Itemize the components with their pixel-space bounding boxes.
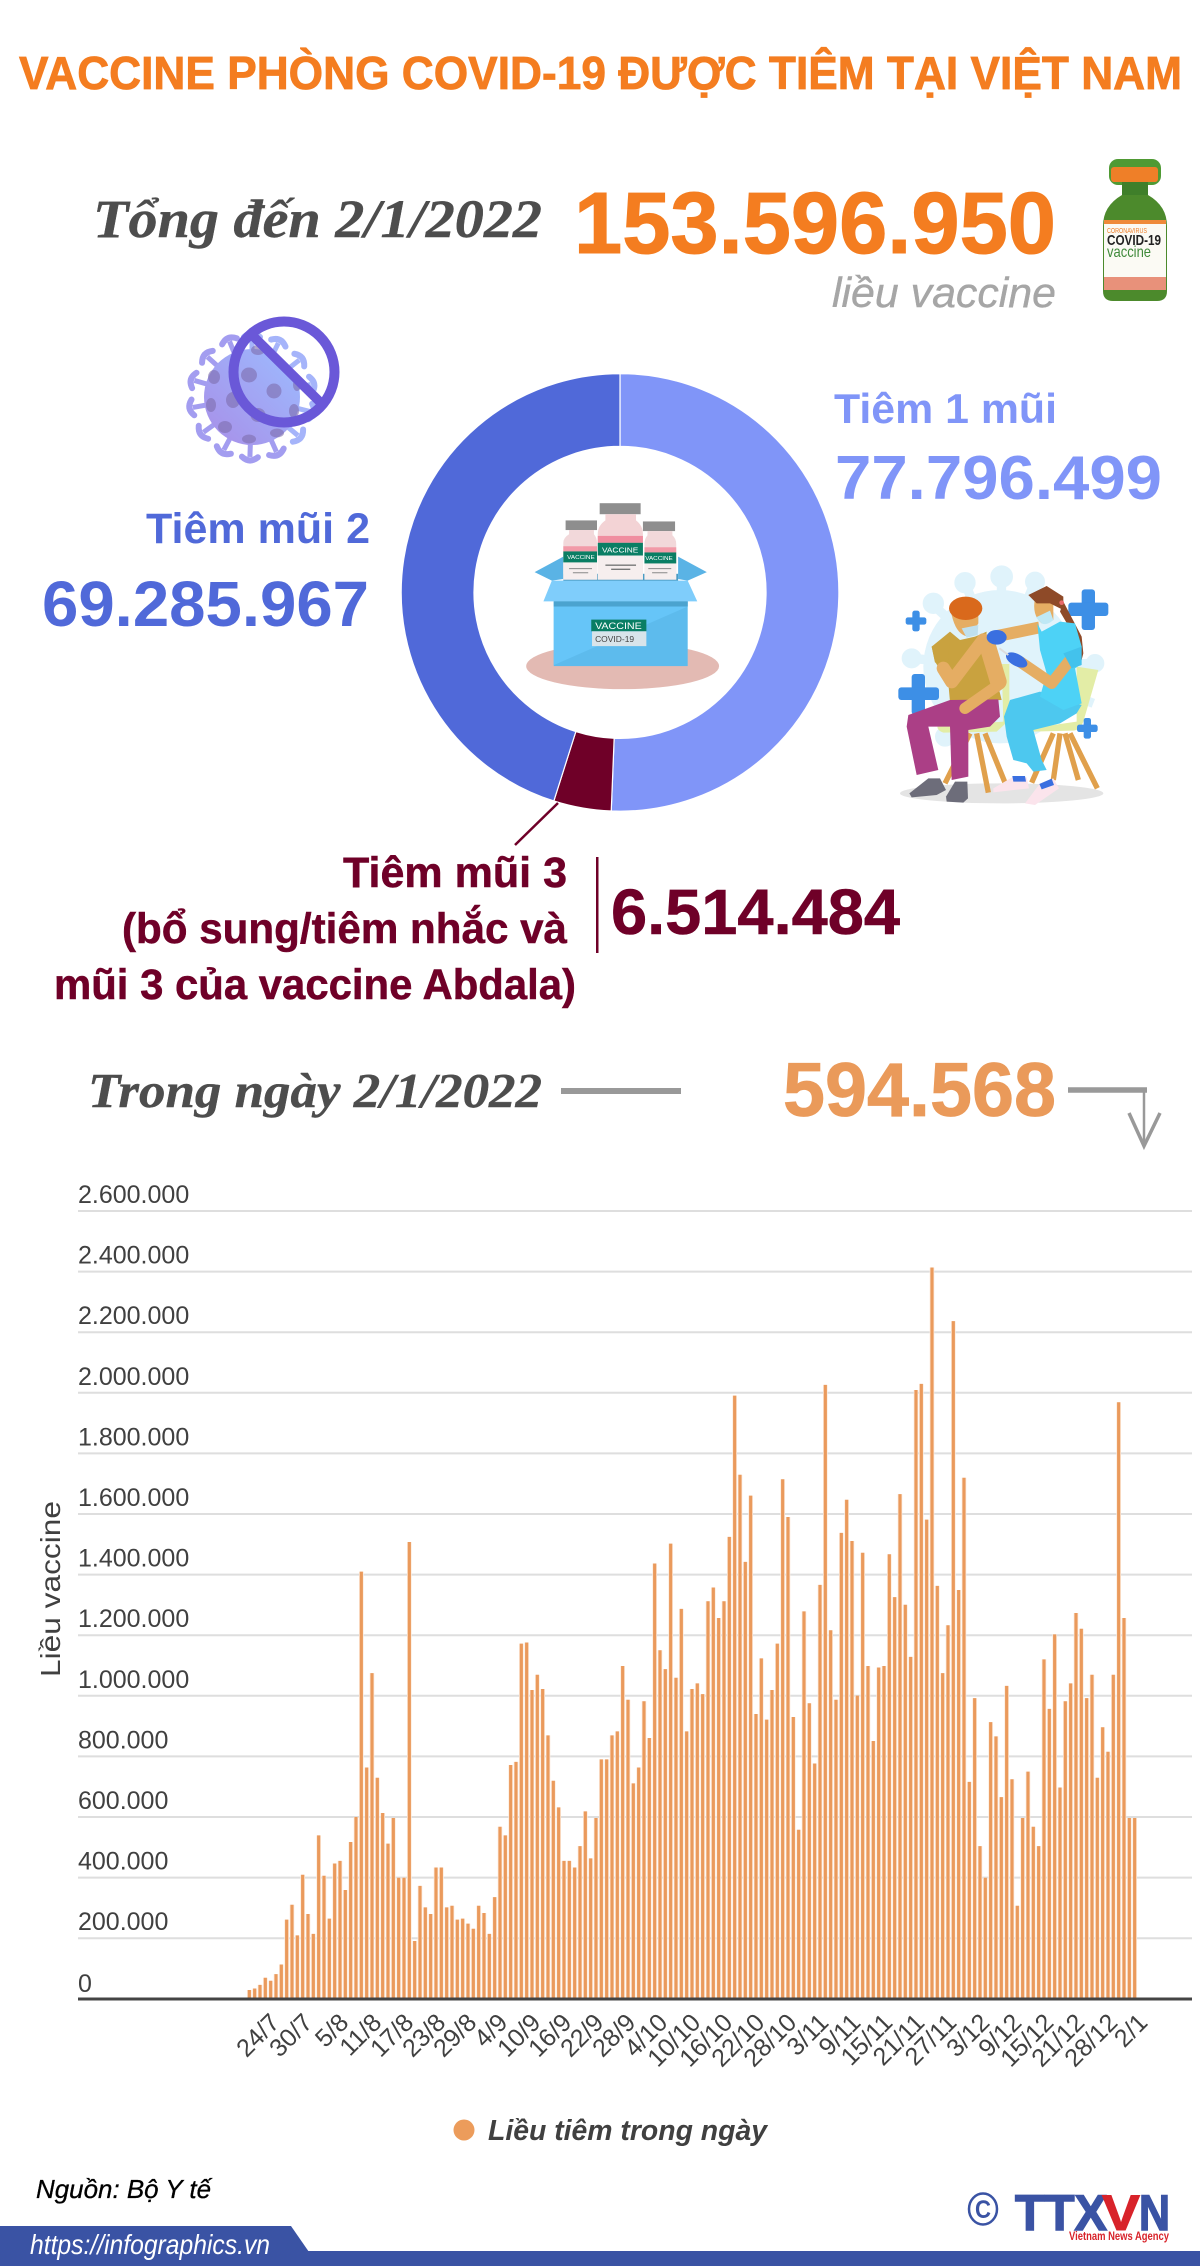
illustration: nurse vaccinating a patient <box>898 570 1108 805</box>
x axis date labels: 21/12 <box>1026 2008 1090 2072</box>
legend: Liều tiêm trong ngày <box>488 2115 769 2147</box>
icon: vaccine bottle: CORONAVIRUS <box>1107 228 1147 235</box>
arrow: down <box>1068 1090 1160 1146</box>
slice: tiêm mũi 2 <box>401 374 620 801</box>
icon: vaccine bottle: COVID-19 <box>1107 232 1161 249</box>
y axis gridlines and labels: 2.600.000 <box>78 1181 189 1209</box>
logo: TTXVN <box>969 2185 1170 2243</box>
x axis date labels: 15/11 <box>836 2008 898 2071</box>
x axis date labels <box>231 2008 1153 2072</box>
x axis date labels: 4/9 <box>469 2008 513 2053</box>
icon: vaccine box <box>526 503 719 689</box>
label: tiêm mũi 3 <box>54 849 576 1009</box>
x axis date labels: 27/11 <box>900 2008 962 2071</box>
logo: TTXVN: N <box>1139 2185 1170 2241</box>
label: tiêm mũi 3: (bổ sung/tiêm nhắc và <box>122 904 568 953</box>
x axis date labels: 22/9 <box>555 2008 609 2063</box>
x axis date labels: 10/10 <box>642 2008 706 2072</box>
slice: tiêm 1 mũi <box>611 374 839 811</box>
x axis date labels: 11/8 <box>334 2008 387 2061</box>
x axis date labels: 17/8 <box>365 2008 419 2063</box>
connector line <box>561 1088 681 1094</box>
label: tiêm mũi 3: mũi 3 của vaccine Abdala) <box>54 961 576 1009</box>
icon: vaccine box: COVID-19 <box>595 634 634 644</box>
logo: TTXVN: TTX <box>1015 2185 1107 2241</box>
logo: TTXVN: V <box>1102 2185 1141 2241</box>
number: tiêm mũi 2: 69.285.967 <box>42 568 369 640</box>
number: tiêm mũi 3: 6.514.484 <box>611 876 900 948</box>
label: tiêm mũi 3: Tiêm mũi 3 <box>343 849 567 897</box>
x axis date labels: 3/12 <box>941 2008 995 2063</box>
logo: TTXVN: Vietnam News Agency <box>1069 2229 1169 2243</box>
pointer line to tiêm mũi 3 <box>515 803 558 845</box>
bars <box>249 1268 1135 1999</box>
x axis date labels: 16/9 <box>523 2008 577 2063</box>
x axis date labels: 28/9 <box>587 2008 641 2063</box>
icon: vaccine box: VACCINE <box>567 554 595 561</box>
y axis gridlines and labels: 800.000 <box>78 1726 168 1754</box>
source: Nguồn: Bộ Y tế <box>36 2174 213 2204</box>
y axis gridlines and labels: 200.000 <box>78 1908 168 1936</box>
x axis date labels: 21/11 <box>868 2008 930 2071</box>
y axis gridlines and labels: 1.200.000 <box>78 1605 189 1633</box>
daily date label: Trong ngày 2/1/2022 <box>88 1063 542 1118</box>
y axis gridlines and labels <box>78 1181 1192 1998</box>
total doses number: 153.596.950 <box>574 175 1056 272</box>
x axis date labels: 4/10 <box>619 2008 673 2063</box>
y axis gridlines and labels: 0 <box>78 1970 92 1998</box>
x axis date labels: 15/12 <box>995 2008 1059 2072</box>
title: VACCINE PHÒNG COVID-19 ĐƯỢC TIÊM TẠI VIỆT NAM <box>19 47 1182 99</box>
daily doses number: 594.568 <box>783 1048 1056 1133</box>
x axis date labels: 2/1 <box>1109 2008 1153 2053</box>
x axis date labels: 30/7 <box>264 2008 318 2063</box>
label: tiêm mũi 2: Tiêm mũi 2 <box>146 505 370 553</box>
x axis date labels: 9/12 <box>973 2008 1027 2063</box>
y axis gridlines and labels: 400.000 <box>78 1848 168 1876</box>
footer bar with website <box>0 2226 1200 2266</box>
footer bar with website: https://infographics.vn <box>30 2229 270 2260</box>
icon: virus with prohibition sign <box>188 322 334 461</box>
number: tiêm 1 mũi: 77.796.499 <box>835 444 1162 513</box>
y axis gridlines and labels: 1.800.000 <box>78 1423 189 1451</box>
x axis date labels: 29/8 <box>428 2008 482 2063</box>
bar chart <box>35 1181 1192 2072</box>
logo: TTXVN: C <box>975 2196 991 2224</box>
label: tiêm 1 mũi: Tiêm 1 mũi <box>834 385 1057 432</box>
icon: vaccine bottle <box>1103 159 1167 301</box>
x axis date labels: 16/10 <box>674 2008 738 2072</box>
y axis gridlines and labels: 2.200.000 <box>78 1302 189 1330</box>
x axis date labels: 28/12 <box>1059 2008 1123 2072</box>
icon: vaccine box: VACCINE <box>595 621 642 632</box>
x axis date labels: 28/10 <box>738 2008 802 2072</box>
slice: tiêm mũi 3 <box>554 732 614 811</box>
y axis gridlines and labels: 1.400.000 <box>78 1545 189 1573</box>
icon: vaccine box: VACCINE <box>602 546 638 554</box>
y axis title: Liều vaccine <box>35 1501 66 1677</box>
icon: vaccine bottle: vaccine <box>1107 244 1151 261</box>
donut chart <box>401 374 839 811</box>
y axis gridlines and labels: 1.000.000 <box>78 1666 189 1694</box>
y axis gridlines and labels: 2.000.000 <box>78 1363 189 1391</box>
x axis line <box>78 1998 1192 2000</box>
x axis date labels: 22/10 <box>706 2008 770 2072</box>
total date label: Tổng đến 2/1/2022 <box>93 189 542 249</box>
x axis date labels: 5/8 <box>310 2008 354 2053</box>
y axis gridlines and labels: 1.600.000 <box>78 1484 189 1512</box>
icon: vaccine box: VACCINE <box>645 555 673 562</box>
x axis date labels: 24/7 <box>231 2008 285 2063</box>
unit label: liều vaccine <box>832 269 1056 316</box>
x axis date labels: 3/11 <box>781 2008 834 2061</box>
y axis gridlines and labels: 600.000 <box>78 1787 168 1815</box>
x axis date labels: 9/11 <box>813 2008 866 2061</box>
y axis gridlines and labels: 2.400.000 <box>78 1242 189 1270</box>
x axis date labels: 23/8 <box>397 2008 451 2063</box>
x axis date labels: 10/9 <box>492 2008 546 2063</box>
